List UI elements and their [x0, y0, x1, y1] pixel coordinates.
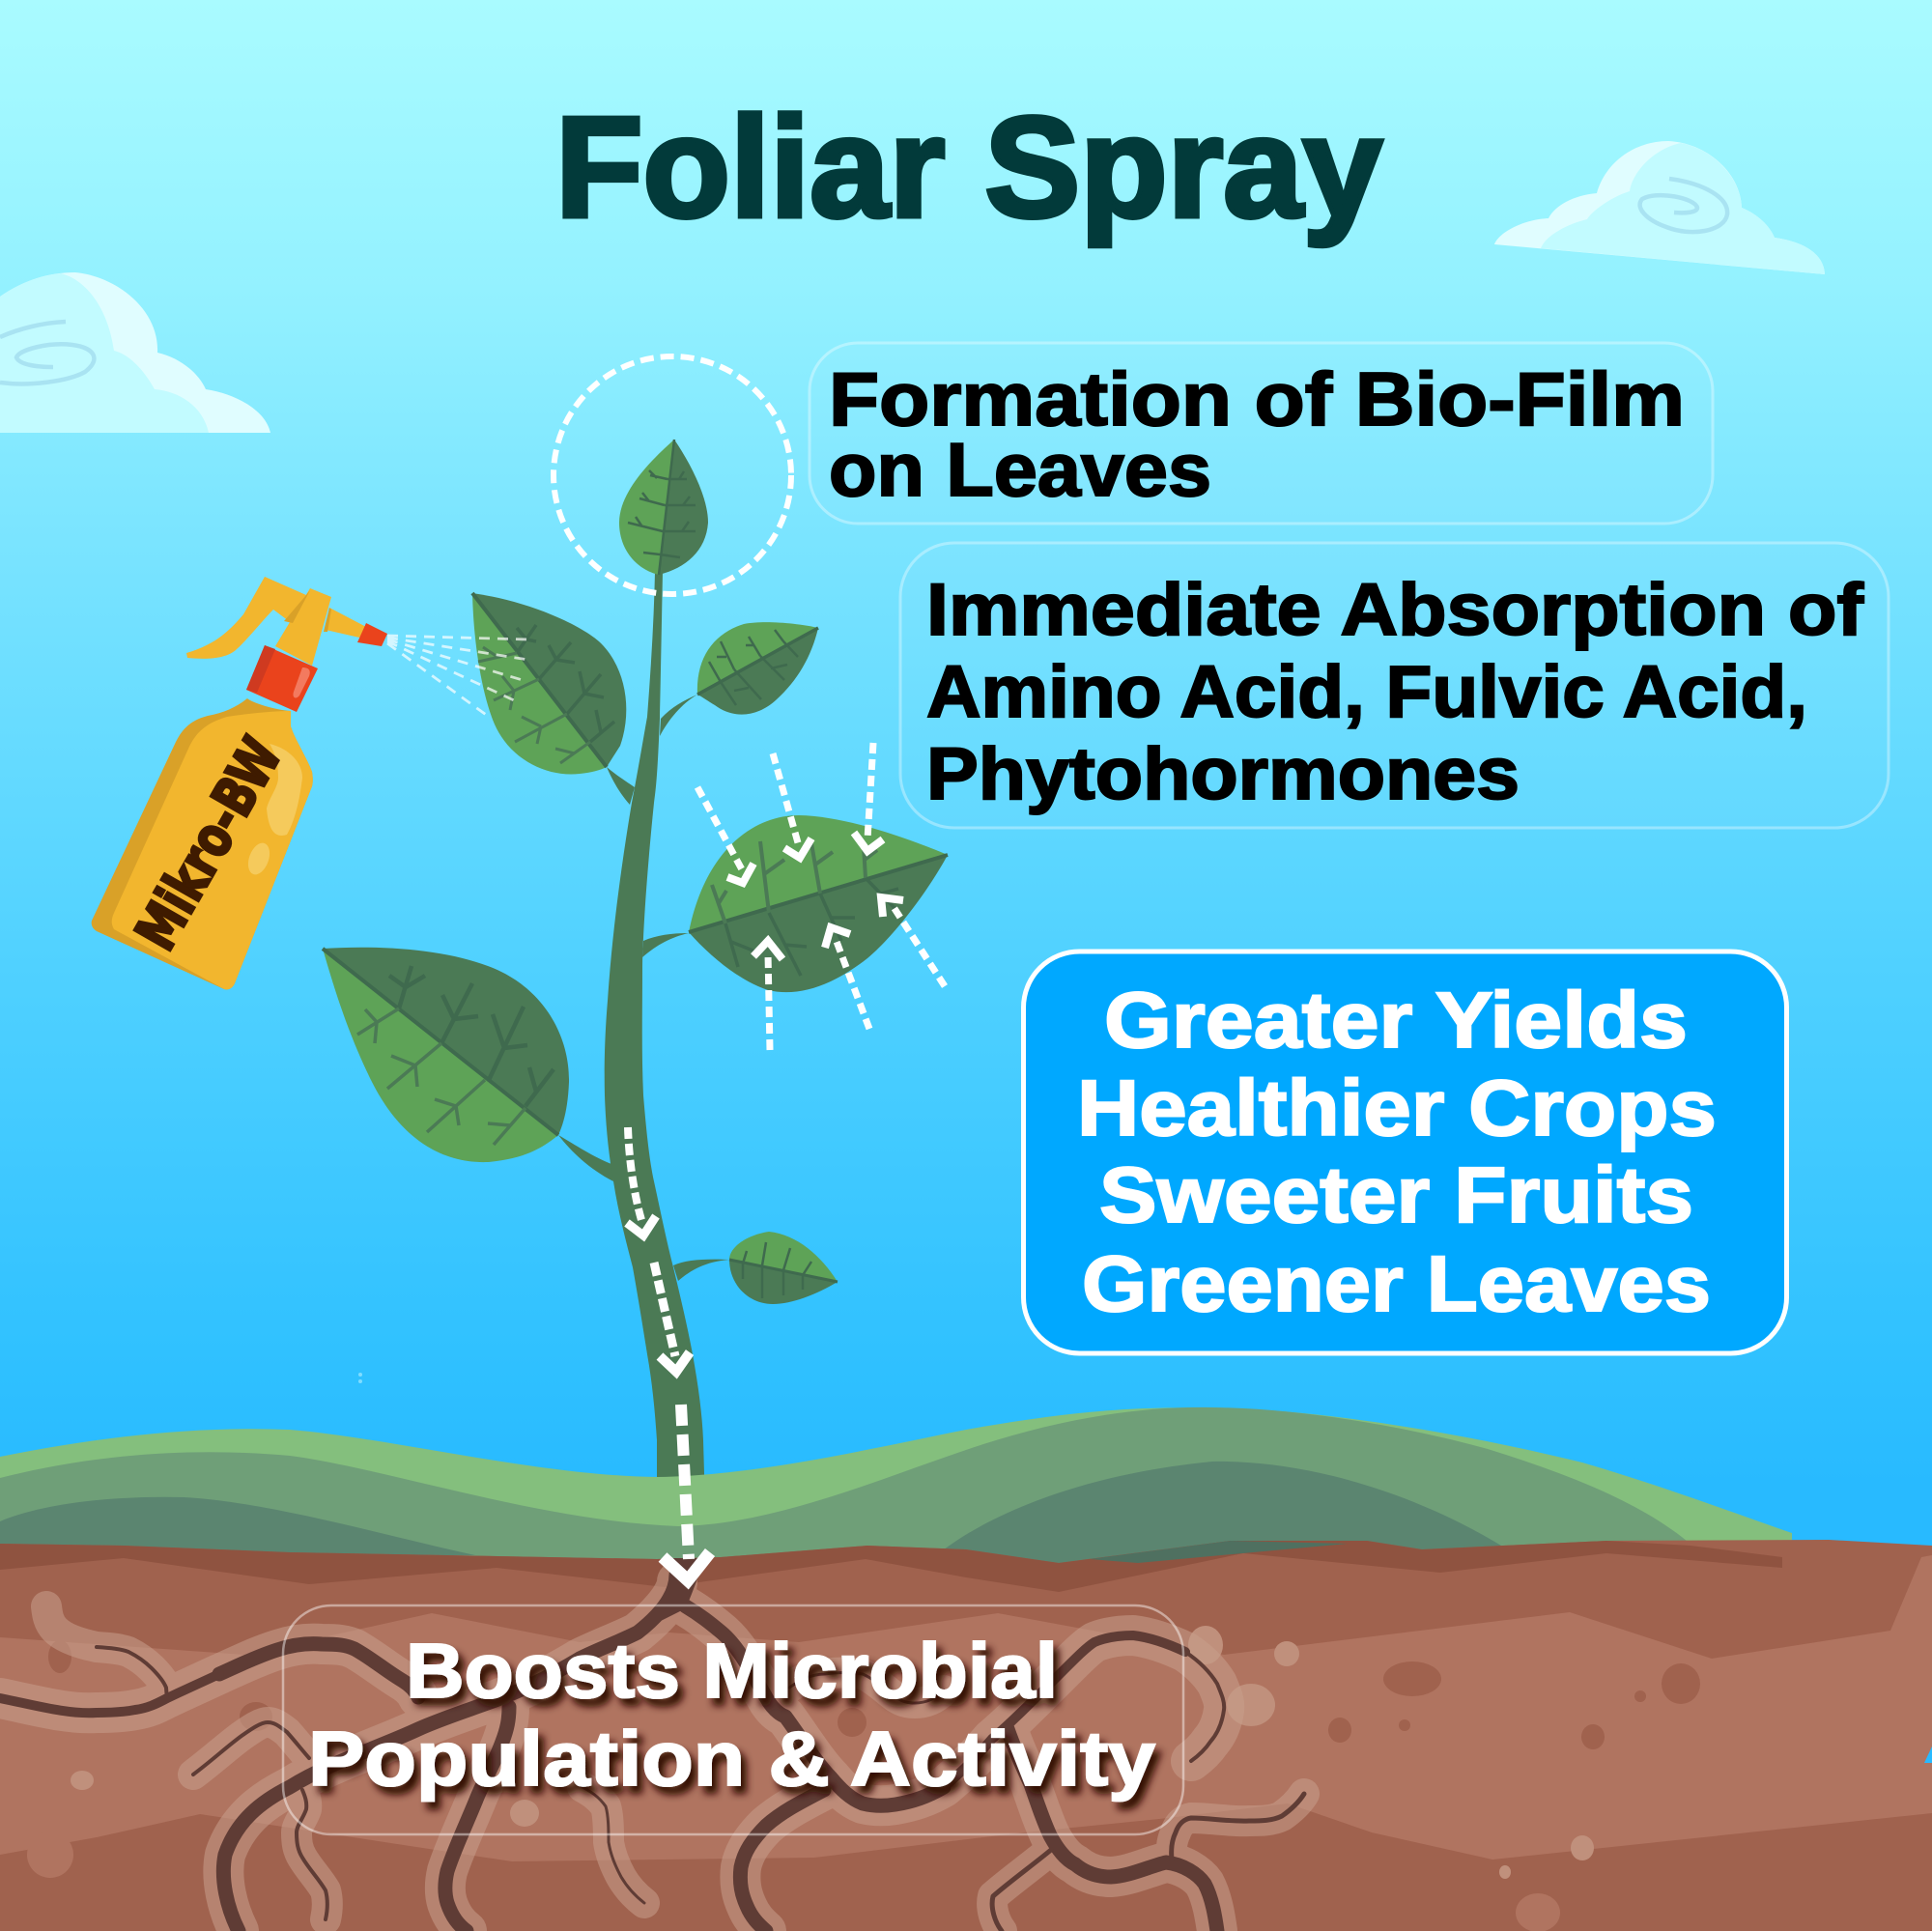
stem arrow lower [663, 1405, 710, 1580]
pump neck [275, 588, 331, 666]
callout: benefits [1024, 951, 1787, 1353]
bottle front [112, 711, 313, 989]
soil dark band [0, 1541, 1782, 1592]
plant stem and leaves [323, 440, 948, 1507]
arrows: absorption into leaf [697, 743, 945, 1050]
nozzle arm shade [324, 608, 331, 632]
callout: microbial population: Population & Activity [308, 1716, 1156, 1802]
hill: middle [0, 1407, 1692, 1565]
stem [605, 572, 705, 1507]
roots [0, 1558, 1304, 1931]
nozzle arm [326, 608, 368, 638]
callout: absorption [900, 543, 1889, 828]
leaf: upper left [472, 593, 626, 775]
arrow 2 [773, 753, 811, 858]
hills [0, 1407, 1792, 1565]
leaf: top [619, 440, 708, 575]
leaf branches [558, 695, 729, 1281]
callout: microbial population: Boosts Microbial [406, 1628, 1058, 1714]
callout: absorption: Amino Acid, Fulvic Acid, [926, 651, 1807, 733]
hill: dark right [925, 1462, 1517, 1565]
stem arrow middle [654, 1263, 690, 1372]
callout: absorption: Immediate Absorption of [926, 569, 1864, 651]
arrow 4 [881, 897, 945, 986]
callout: microbial population [283, 1605, 1183, 1834]
trigger [186, 577, 306, 659]
leaf: lower left [323, 948, 569, 1162]
leaf: bottom [729, 1232, 838, 1304]
soil base [0, 1540, 1932, 1931]
root core: thin [97, 1647, 1304, 1931]
callout: bio-film: on Leaves [829, 427, 1211, 512]
callout: absorption: Phytohormones [926, 733, 1520, 815]
leaf: middle, receiving spray [689, 815, 948, 992]
spray bottle [92, 577, 387, 989]
title: Foliar Spray [555, 88, 1382, 247]
arrow 3 [854, 743, 883, 851]
root trunk [657, 1558, 705, 1623]
hill: dark left [0, 1497, 475, 1555]
stem arrow upper [627, 1127, 656, 1235]
arrow 5 [825, 927, 869, 1029]
collar highlight [293, 667, 310, 698]
collar [246, 645, 318, 712]
arrow 1 [697, 787, 753, 883]
arrows: transport down the stem [627, 1127, 710, 1580]
root core: secondary [0, 1635, 1185, 1787]
collar shadow [246, 645, 275, 693]
ridge shadow on hill [1090, 1541, 1348, 1563]
blue notch [1924, 1746, 1932, 1763]
callout: benefits: Sweeter Fruits [1099, 1151, 1693, 1239]
bottle highlights [267, 744, 302, 836]
nozzle tip [357, 623, 387, 646]
callout: bio-film: Formation of Bio-Film [829, 356, 1685, 441]
root halo [0, 1581, 1304, 1931]
soil [0, 1540, 1932, 1931]
soil pebbles: dark [48, 1640, 1700, 1749]
callout: benefits: Greater Yields [1104, 977, 1688, 1065]
trigger shade [284, 590, 310, 623]
soil light layer [0, 1555, 1932, 1861]
soil pebbles: light [71, 1626, 1594, 1879]
callout: benefits: Healthier Crops [1077, 1065, 1717, 1152]
bottle body [92, 698, 313, 989]
cloud: upper right [1494, 141, 1825, 274]
leaf: upper right [697, 622, 818, 715]
spray mist [387, 636, 528, 717]
arrow 6 [753, 941, 782, 1050]
callout: bio-film [810, 343, 1713, 524]
sky specks [358, 1373, 362, 1383]
callout: benefits: Greener Leaves [1082, 1240, 1711, 1328]
hill: front [0, 1407, 1792, 1565]
soil pebbles: faint [27, 1832, 1560, 1931]
root core: main [219, 1575, 1217, 1931]
bottle label: Mikro-BW [123, 726, 295, 961]
dashed circle around top leaf [554, 356, 791, 594]
cloud: upper left [0, 272, 270, 433]
